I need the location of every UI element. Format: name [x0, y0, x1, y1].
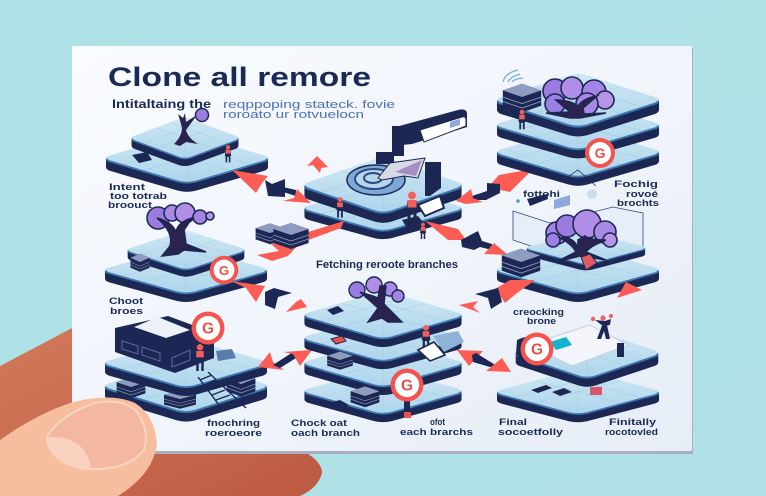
bottom right labels: rocotovled [605, 427, 658, 438]
intro text: reqppoping stateck. fovie [223, 99, 395, 111]
arrow: left middle to bottom center [231, 281, 307, 312]
center label: Fetching reroote branches [316, 259, 458, 271]
bottom center labels: Chock oat [291, 418, 348, 429]
arrow: right middle to bottom center [459, 280, 535, 313]
icon: tree [349, 277, 404, 322]
bottom center labels: ofot [430, 417, 446, 428]
icon: celebrating figure [591, 314, 613, 339]
bottom right platforms [497, 314, 659, 422]
icon: red badge [192, 312, 224, 344]
bottom right labels: Finitally [609, 417, 657, 428]
thumb [0, 398, 157, 496]
right middle platform with tree and wall [497, 207, 659, 302]
card panel [72, 46, 693, 454]
creating label: brone [527, 316, 556, 327]
arrow: center to right middle [425, 221, 508, 255]
bottom center labels: each brarchs [400, 427, 473, 438]
icon: wifi [503, 70, 523, 82]
icon: document [544, 325, 628, 366]
icon: target [347, 165, 405, 195]
bottom center stack [304, 277, 464, 422]
icon: red badge [516, 336, 545, 362]
intro text: roroato ur rotvuelocn [223, 109, 364, 121]
hand behind card [0, 328, 322, 496]
icon: large tree [543, 77, 614, 118]
creating label [513, 307, 564, 327]
icon: sapling [174, 108, 208, 146]
bottom right labels: Final [499, 417, 527, 428]
arrow: small up [307, 156, 328, 173]
left middle label: Choot [109, 296, 144, 307]
intro text [112, 97, 395, 121]
intro text: Intitaltaing the [112, 97, 211, 111]
side labels top right: brochts [617, 198, 659, 209]
bottom center labels: oach branch [291, 428, 360, 439]
bottom left label: fnochring [207, 418, 260, 429]
arrow: center to left doc stack [256, 221, 344, 261]
wall panel [513, 207, 643, 262]
arrow: right triangle [617, 282, 642, 298]
right top stack [497, 70, 659, 186]
left middle label: broes [110, 306, 143, 317]
bottom left label: roeroeore [205, 428, 262, 439]
left middle label [109, 296, 144, 317]
arrow: bottom left to bottom center [258, 350, 312, 370]
arrow: step 1 to center [232, 170, 311, 203]
thumbnail [47, 402, 146, 469]
bottom left label [205, 418, 262, 439]
arrow: bottom center to bottom right [457, 350, 511, 372]
left middle platform with tree [105, 203, 267, 302]
arrow: center to right top [456, 169, 533, 204]
icon: ladder [198, 372, 246, 409]
side labels top right: fottohi [523, 189, 560, 200]
icon: doc stack [256, 223, 309, 249]
bottom right labels [498, 417, 658, 438]
icon: tree [546, 210, 617, 262]
bottom right labels: socoetfolly [498, 427, 564, 438]
creating label: creocking [513, 307, 564, 318]
icon: storage building [115, 316, 214, 373]
bottom center labels [291, 417, 473, 439]
connector from stack to wall panel [516, 170, 597, 209]
center platform with terminal [304, 109, 467, 239]
step 1 platform with sapling [106, 108, 268, 192]
side labels top right [523, 179, 659, 209]
step 1 label: too totrab [110, 191, 167, 202]
side labels top right: Fochig [614, 179, 658, 190]
step 1 label [108, 182, 167, 211]
icon: red badge [390, 368, 424, 418]
icon: red badge [210, 256, 238, 284]
step 1 label: Intent [109, 182, 146, 193]
icon: terminal machine [376, 109, 467, 196]
side labels top right: rovoé [626, 189, 658, 200]
icon: red badge [585, 138, 615, 168]
title: Clone all remore [108, 62, 371, 92]
icon: phone and figure [418, 325, 464, 361]
step 1 label: broouct [108, 200, 153, 211]
bottom left platform with building [105, 312, 267, 422]
icon: tree [147, 203, 214, 256]
